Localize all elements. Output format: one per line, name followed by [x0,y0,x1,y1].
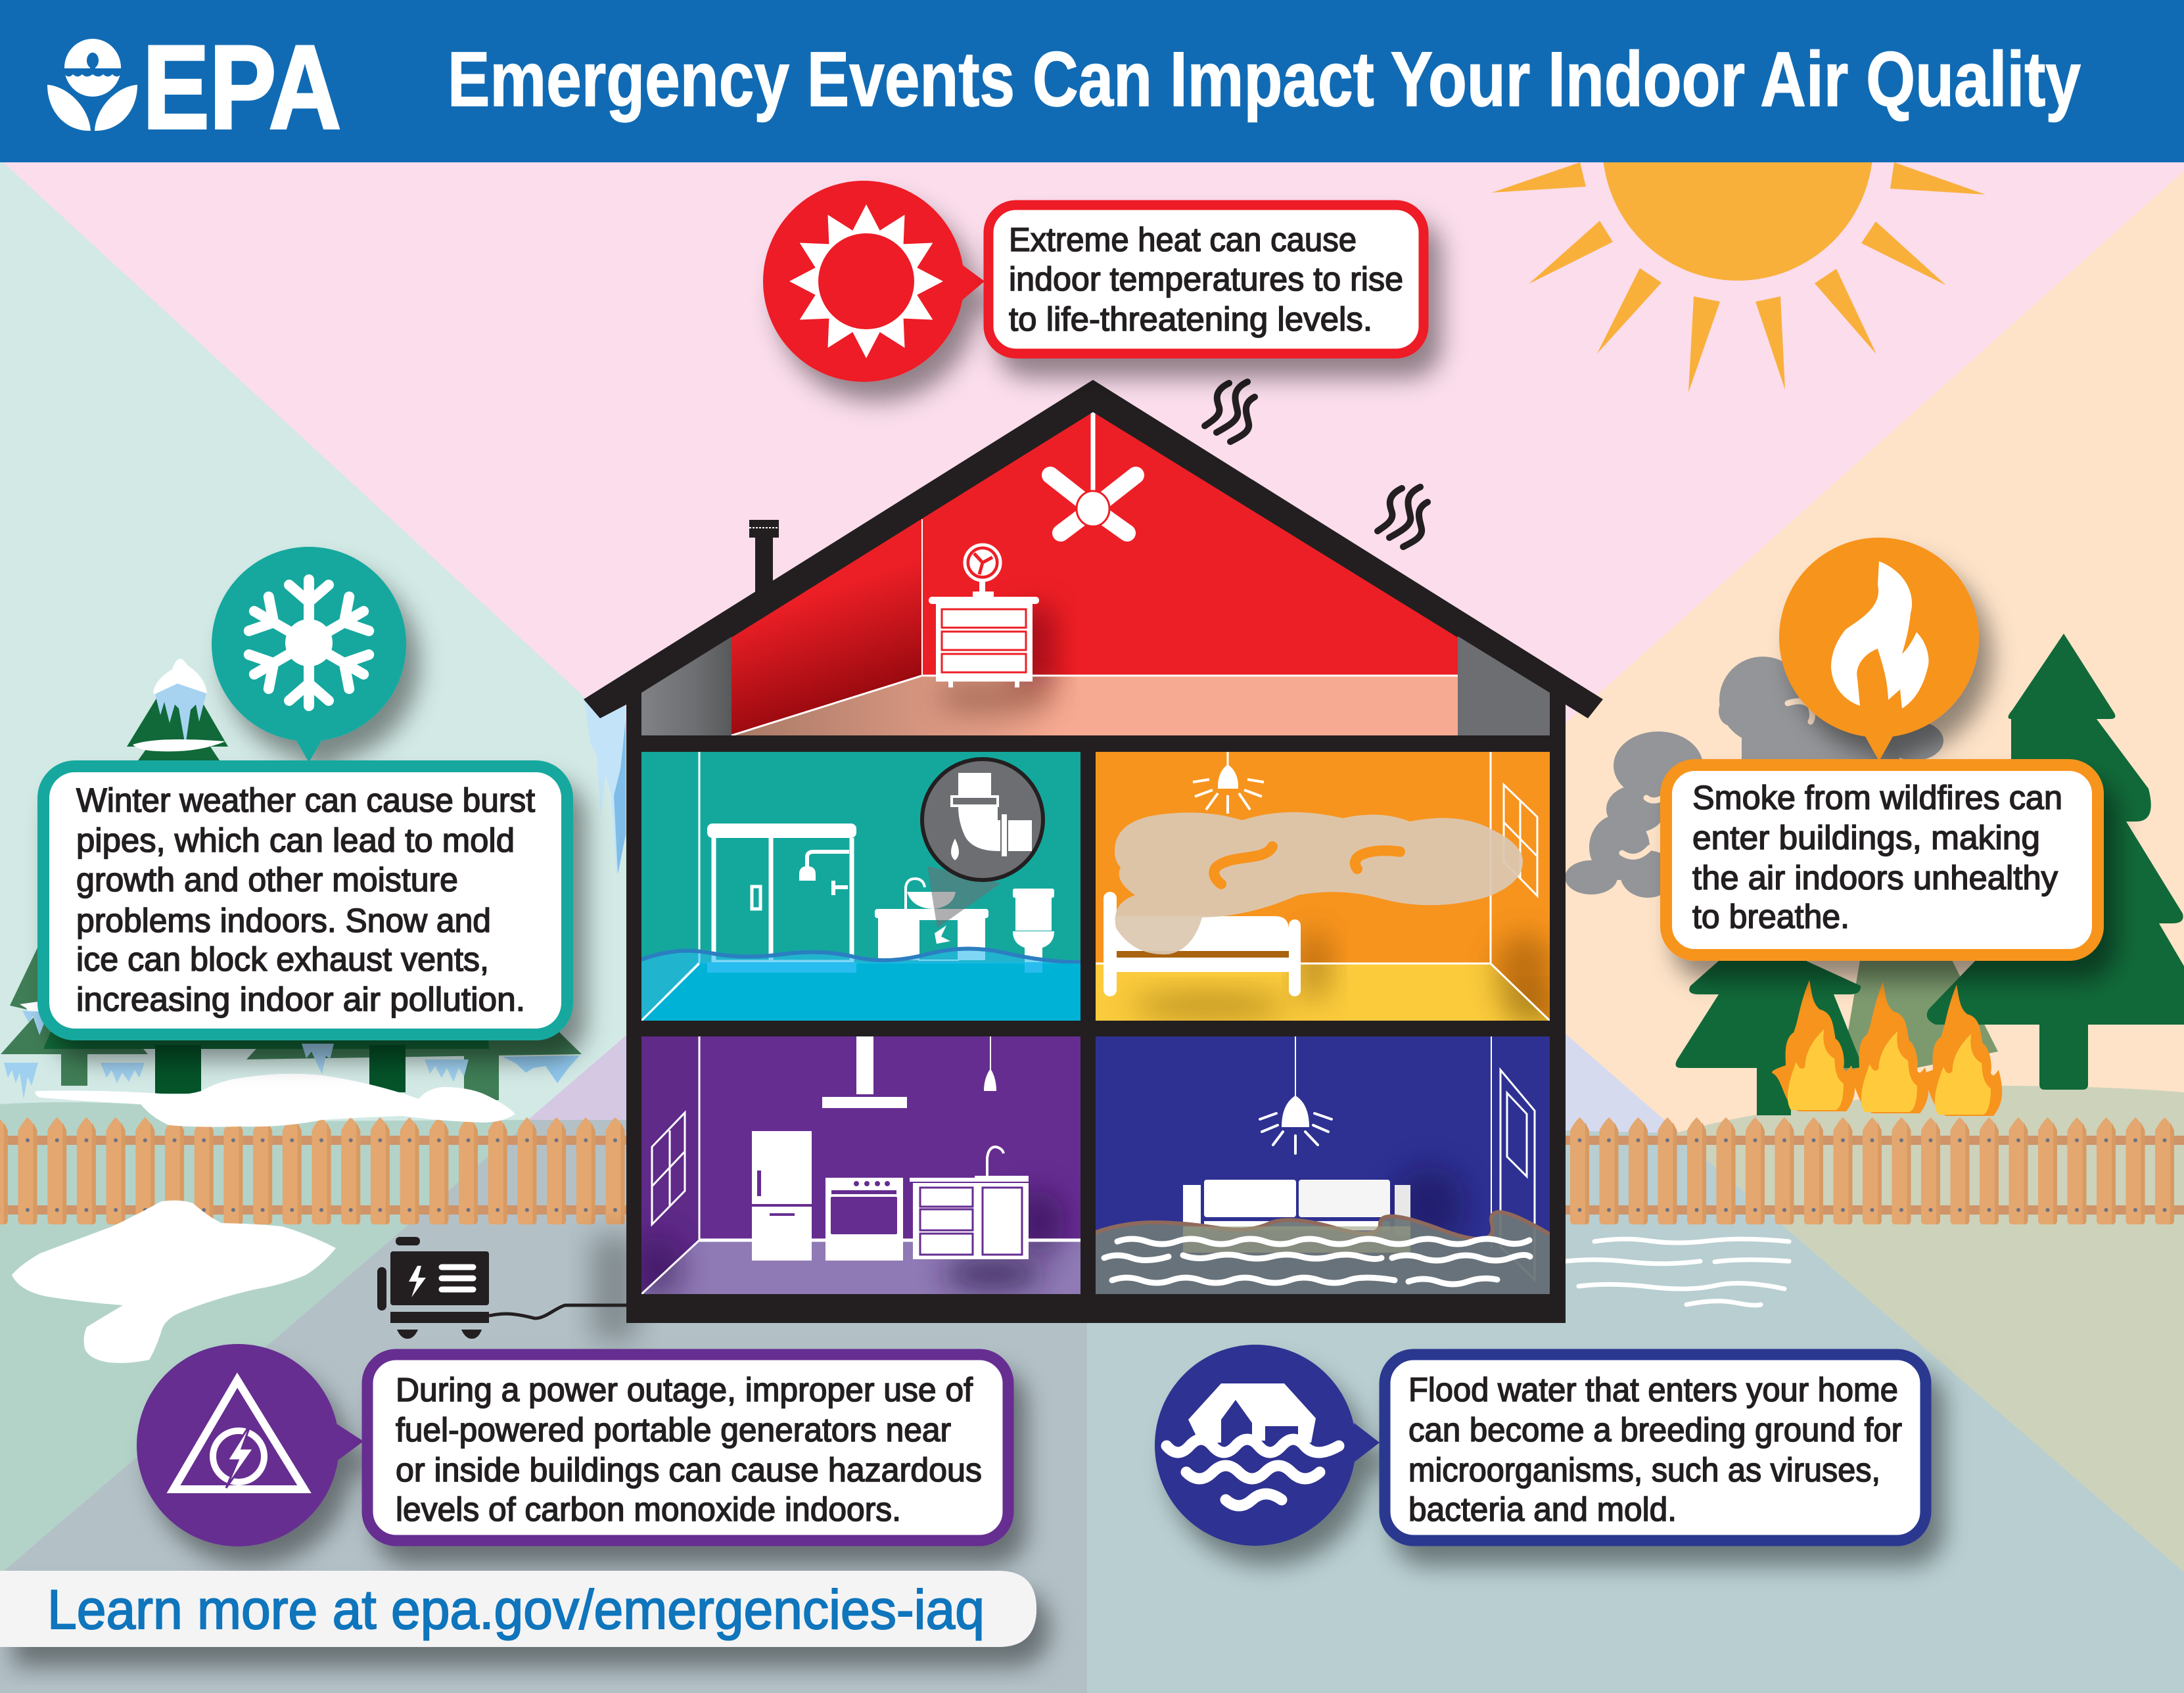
attic room: extreme heat [641,407,1550,735]
callout: generator text box: or inside buildings can cause hazardous [396,1451,982,1489]
pendant lamp [1260,1036,1332,1153]
background light-green tree [1840,960,1998,1078]
chimney [749,520,779,595]
callout: wildfire text box: to breathe. [1692,898,1849,935]
callout: winter text box: Winter weather can cause burst [76,781,535,819]
bathroom: burst pipe flooding [641,752,1080,1021]
callout: generator text box [367,1355,1008,1541]
logo letters: EPA [143,21,341,154]
magnifier beam [927,866,1001,928]
callout: heat text box: to life-threatening levels. [1009,300,1372,338]
toilet [1013,889,1054,962]
snow patch on ground [12,1201,336,1363]
callout: generator icon [137,1344,363,1546]
callout: winter icon [212,547,406,762]
heat squiggles: upper [1205,382,1255,442]
callout: winter text box: increasing indoor air pollution. [76,981,525,1018]
callout: wildfire text box: Smoke from wildfires can [1692,779,2062,816]
winter trees with snow and icicles [1,659,582,1100]
window [652,1113,685,1224]
sofa [1183,1180,1410,1236]
dresser with table fan [929,545,1039,687]
callout: flood icon [1155,1345,1380,1546]
logo flower mark [47,39,137,131]
learn more bar: Learn more at epa.gov/emergencies-iaq [47,1579,985,1640]
large sun [1492,162,1986,392]
counter cabinets [910,1147,1029,1259]
fence: right [1566,1115,2184,1226]
snow drifts on fence line [35,1074,515,1127]
flood water surface [641,948,1080,1021]
vanity and sink [875,879,988,960]
outdoor flood waves [1566,1239,1789,1305]
flood water in room [1096,1212,1550,1294]
callout: heat text box: indoor temperatures to rise [1009,260,1403,298]
icon: flooded house [1167,1383,1339,1506]
callout: generator text box: fuel-powered portable generators near [396,1411,951,1449]
callout: winter text box: problems indoors. Snow and [76,902,491,939]
callout: flood text box: bacteria and mold. [1408,1491,1677,1528]
wildfire flames [1772,980,2002,1116]
callout: generator text box: During a power outage, improper use of [396,1371,973,1408]
living room: flood [1096,1036,1550,1294]
shower [707,823,856,962]
callout: generator text box: levels of carbon monoxide indoors. [396,1491,901,1528]
kitchen: generator hazard [631,1036,1080,1301]
icon: sun [789,204,943,358]
callout: wildfire text box: enter buildings, making [1692,819,2040,856]
callout: heat text box: Extreme heat can cause [1009,221,1357,258]
tree: small left pine [1676,946,1863,1115]
house structure [584,380,1603,1323]
window [1504,785,1537,896]
callout: flood text box: can become a breeding ground for [1408,1411,1902,1449]
heat squiggles: lower [1378,487,1428,547]
smoke swirls [1214,846,1400,884]
ceiling lamp [1193,752,1264,814]
EPA logo [47,21,341,154]
callout: flood text box [1385,1355,1926,1541]
callout: heat icon [763,181,985,382]
soft shadow beside house [592,1236,638,1341]
portable generator with cord [377,1237,628,1339]
tree: large right pine [1927,634,2184,1090]
stove [825,1178,903,1261]
callout: flood text box: Flood water that enters your home [1408,1371,1898,1408]
icon: warning triangle with bolt [174,1380,304,1489]
callout: winter text box: ice can block exhaust vents, [76,940,489,978]
icicles on left eave [584,700,626,874]
icon: flame [1831,561,1928,708]
range hood [822,1036,907,1108]
callout: winter text box [43,766,567,1034]
callout: wildfire text box [1666,765,2098,955]
magnified burst pipe [922,759,1043,880]
smoke cloud in room [1115,812,1523,954]
callout: flood text box: microorganisms, such as viruses, [1408,1451,1880,1489]
callout: wildfire text box: the air indoors unhealthy [1692,859,2058,896]
header band [0,0,2184,162]
callout: winter text box: growth and other moisture [76,861,458,898]
ground areas [0,1086,2184,1693]
refrigerator [752,1131,812,1261]
fence: left [0,1115,626,1226]
bed [1104,892,1301,996]
pendant light [984,1036,996,1091]
callout: winter text box: pipes, which can lead to mold [76,822,515,859]
callout: heat text box [988,205,1424,354]
ceiling fan [1050,412,1136,533]
callout: wildfire icon [1779,538,1979,761]
wildfire smoke clouds [1565,657,1943,898]
bedroom: wildfire smoke [1096,752,1571,1025]
icon: snowflake [244,580,373,706]
